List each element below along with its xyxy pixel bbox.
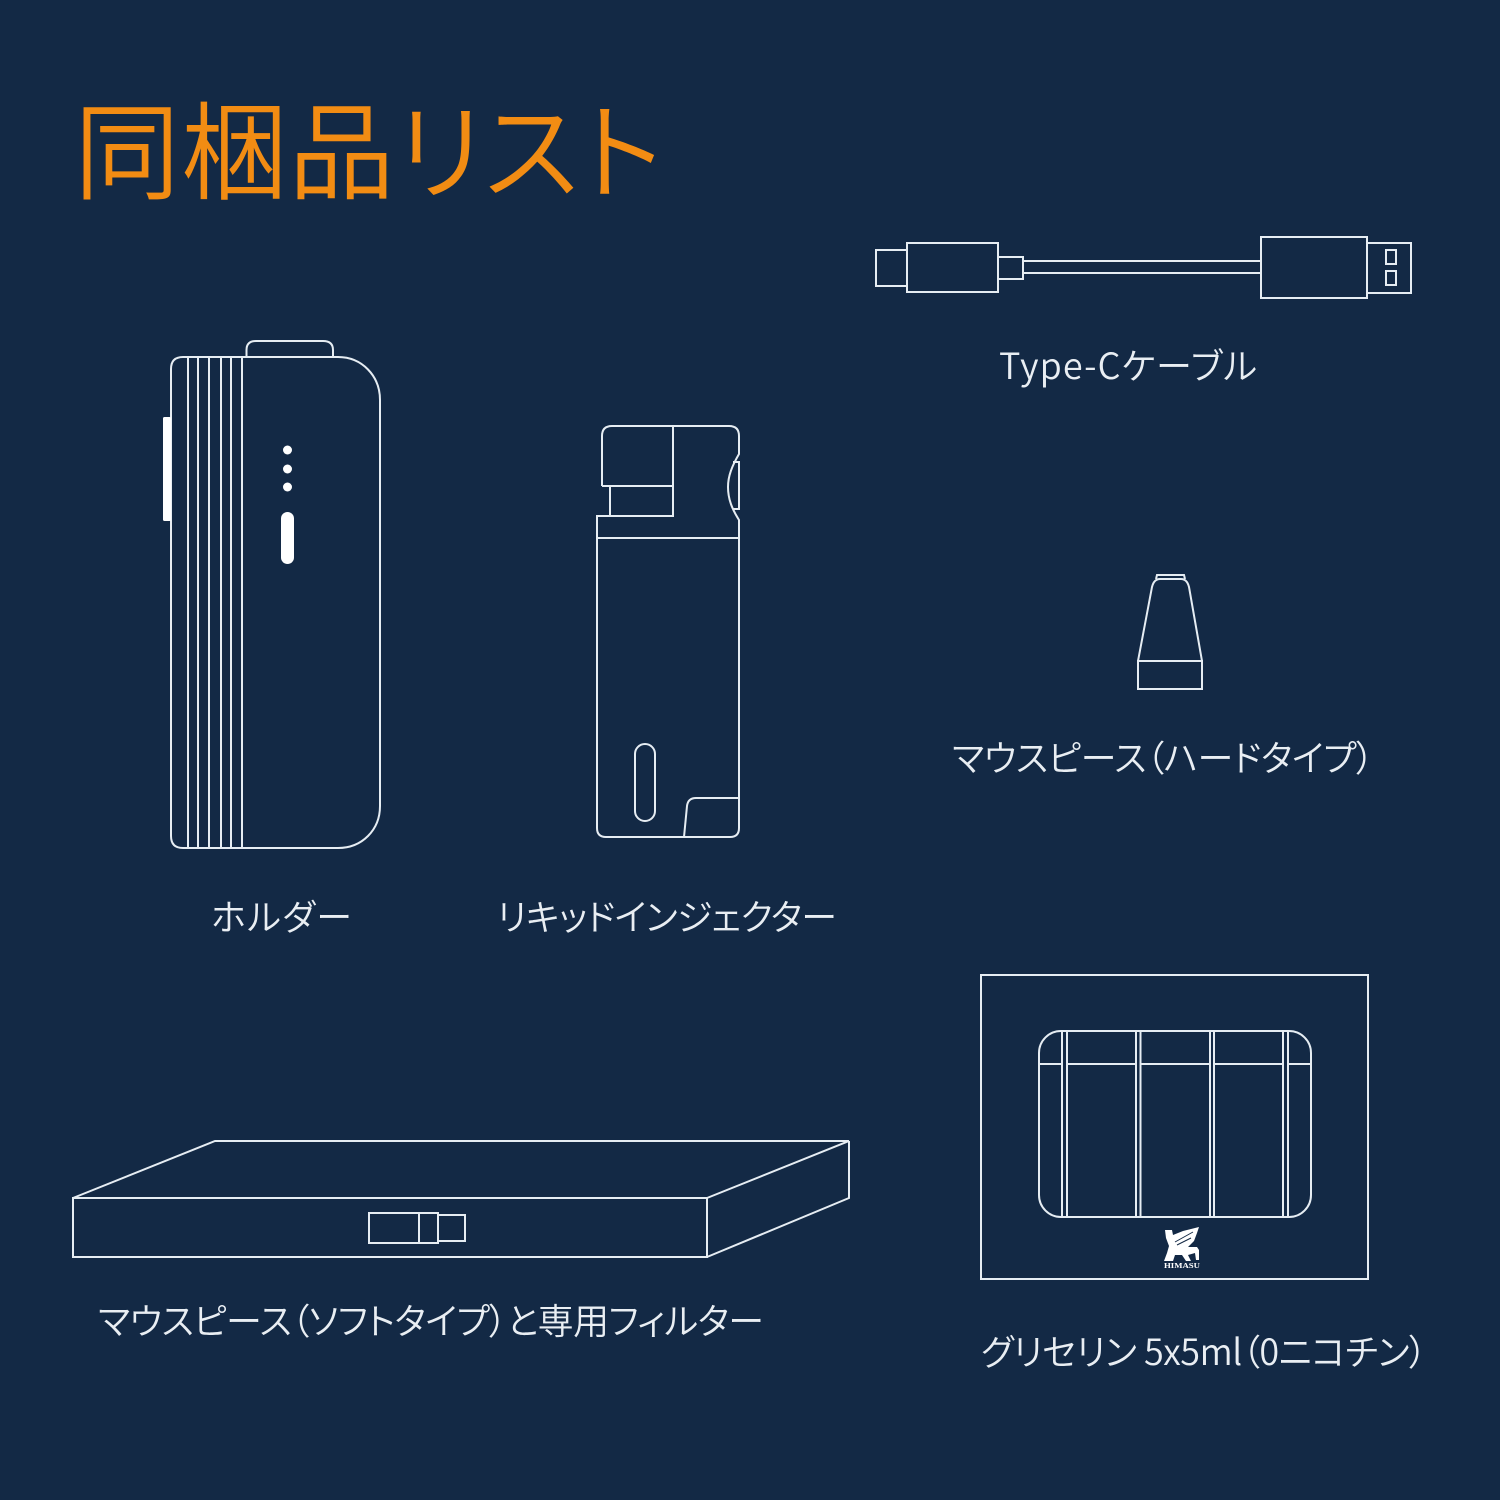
logo: winged lion <box>1164 1227 1201 1270</box>
icon: USB Type-C cable <box>876 237 1411 298</box>
label: liquid injector: リキッドインジェクター <box>497 889 837 941</box>
label: holder: ホルダー <box>211 889 352 941</box>
logo: winged lion: HIMASU <box>1164 1261 1201 1270</box>
label: Type-C cable: Type-Cケーブル <box>999 338 1257 390</box>
icon: holder <box>163 341 380 848</box>
icon: hard mouthpiece <box>1138 575 1202 689</box>
icon: liquid injector <box>597 426 739 837</box>
title: 同梱品リスト <box>74 68 662 222</box>
icon: glycerin package <box>981 975 1368 1279</box>
label: hard mouthpiece: マウスピース（ハードタイプ） <box>952 730 1374 782</box>
label: soft mouthpiece and filters: マウスピース（ソフトタイプ）と専用フィルター <box>98 1293 764 1345</box>
icon: soft mouthpiece filter box <box>73 1141 849 1257</box>
label: glycerin: グリセリン 5x5ml（0ニコチン） <box>981 1324 1427 1376</box>
